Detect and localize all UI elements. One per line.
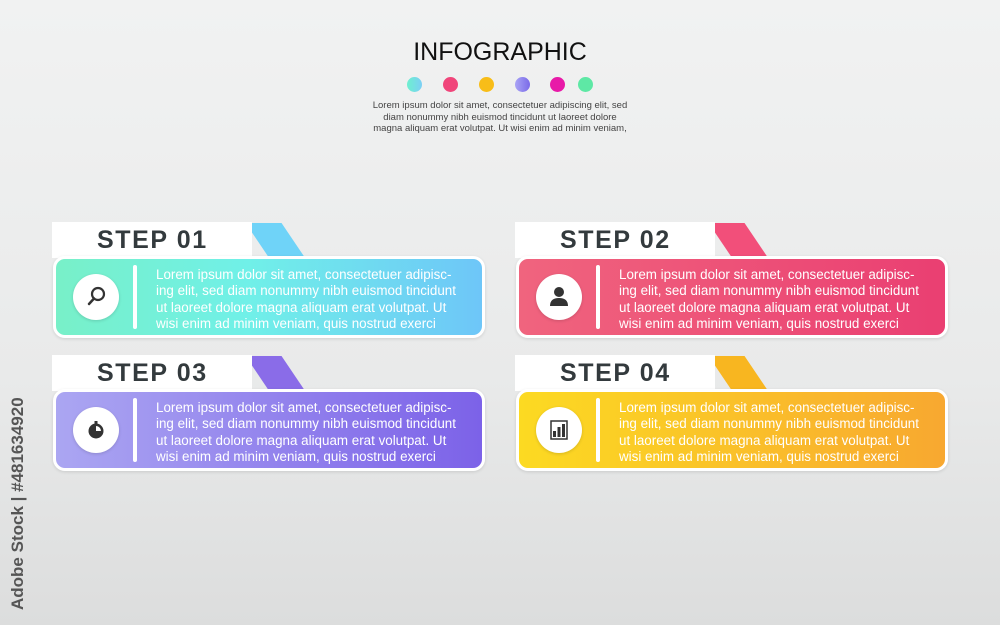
text block: ut laoreet dolore magna aliquam erat volutpat. Ut [156,300,446,315]
subtitle text: diam nonummy nibh euismod tincidunt ut laoreet dolore [383,112,617,122]
watermark: vertical text: Adobe Stock | #481634920 [8,397,27,610]
heading: step 01: STEP 01 [97,226,208,254]
heading: step 01 [52,222,252,258]
text block [619,400,919,464]
text block: wisi enim ad minim veniam, quis nostrud exerci [156,316,436,331]
text block: Lorem ipsum dolor sit amet, consectetuer adipisc- [619,400,914,415]
text block: Lorem ipsum dolor sit amet, consectetuer adipisc- [156,400,451,415]
text block [156,267,456,331]
heading: step 02 [515,222,715,258]
heading: step 02: STEP 02 [560,226,671,254]
subtitle text [373,100,627,134]
icon: bar chart [536,407,582,453]
heading: step 03 [52,355,252,391]
panel: step 03 [52,355,486,473]
panel: step 04 [515,355,949,473]
text block: Lorem ipsum dolor sit amet, consectetuer adipisc- [619,267,914,282]
text block: ing elit, sed diam nonummy nibh euismod tincidunt [619,283,919,298]
title: INFOGRAPHIC [413,38,587,66]
heading: step 04: STEP 04 [560,359,671,387]
text block: ing elit, sed diam nonummy nibh euismod tincidunt [156,416,456,431]
panel: step 01 [52,222,486,340]
text block: ing elit, sed diam nonummy nibh euismod tincidunt [156,283,456,298]
icon: timer [73,407,119,453]
colour dots [407,77,593,92]
text block: ut laoreet dolore magna aliquam erat volutpat. Ut [619,433,909,448]
subtitle text: Lorem ipsum dolor sit amet, consectetuer adipiscing elit, sed [373,100,627,111]
text block [619,267,919,331]
text block: ut laoreet dolore magna aliquam erat volutpat. Ut [619,300,909,315]
panel: step 02 [515,222,949,340]
text block: ut laoreet dolore magna aliquam erat volutpat. Ut [156,433,446,448]
icon: magnifier [73,274,119,320]
icon: user [536,274,582,320]
text block: ing elit, sed diam nonummy nibh euismod tincidunt [619,416,919,431]
text block: wisi enim ad minim veniam, quis nostrud exerci [619,316,899,331]
heading: step 04 [515,355,715,391]
text block [156,400,456,464]
text block: wisi enim ad minim veniam, quis nostrud exerci [156,449,436,464]
subtitle text: magna aliquam erat volutpat. Ut wisi enim ad minim veniam, [373,123,627,134]
text block: wisi enim ad minim veniam, quis nostrud exerci [619,449,899,464]
text block: Lorem ipsum dolor sit amet, consectetuer adipisc- [156,267,451,282]
heading: step 03: STEP 03 [97,359,208,387]
